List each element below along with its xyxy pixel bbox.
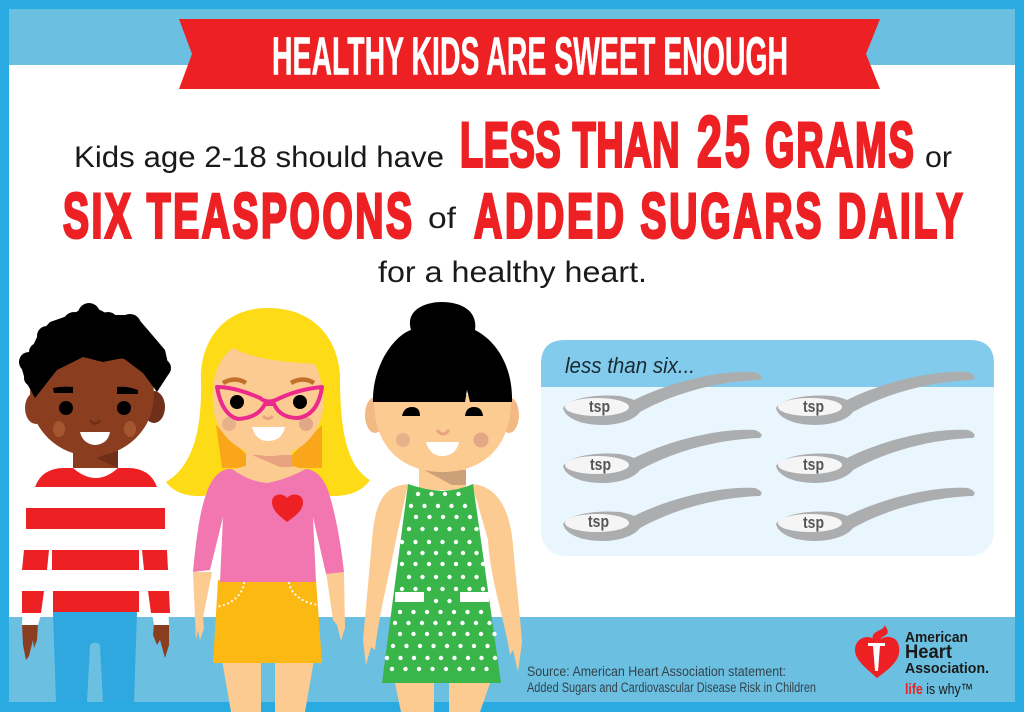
green dress — [382, 484, 501, 683]
girl legs — [222, 660, 314, 712]
green girl nose — [437, 430, 449, 434]
panel header — [541, 340, 994, 387]
girl neck — [230, 445, 308, 490]
spoon 3 — [563, 488, 762, 541]
green girl face — [374, 395, 511, 472]
headline message: or — [925, 141, 952, 174]
spoon 5: tsp — [803, 455, 824, 474]
headline message: LESS THAN — [460, 111, 680, 181]
title ribbon — [179, 19, 880, 89]
girl skirt — [213, 580, 322, 663]
spoon 1 — [563, 372, 762, 425]
spoon 4 — [776, 372, 975, 425]
logo: American Heart Association — [855, 625, 989, 698]
headline message: Kids age 2-18 should have — [74, 141, 444, 174]
headline message: GRAMS — [765, 111, 914, 181]
logo: American Heart Association: Association. — [905, 661, 989, 677]
spoon 2 — [563, 430, 762, 483]
girl glasses — [217, 387, 322, 419]
source note: Added Sugars and Cardiovascular Disease Risk in Children — [527, 680, 816, 695]
boy ears — [25, 392, 47, 424]
logo: American Heart Association: Heart — [905, 642, 953, 663]
panel body — [541, 340, 994, 556]
spoon 5 — [776, 430, 975, 483]
character: boy in striped shirt — [19, 303, 171, 702]
boy cheeks — [53, 421, 65, 437]
boy hands — [22, 624, 38, 660]
girl arms — [193, 572, 212, 640]
green girl eyes — [402, 407, 420, 416]
green girl arms — [363, 484, 408, 665]
boy striped shirt — [22, 468, 169, 625]
girl inner hair shade — [216, 425, 322, 468]
girl eyebrows — [223, 380, 246, 383]
bottom light blue band — [9, 617, 1015, 702]
green girl smile — [426, 442, 459, 456]
spoon 2: tsp — [590, 455, 611, 474]
spoon 4: tsp — [803, 397, 824, 416]
headline message: SIX TEASPOONS — [63, 182, 412, 252]
character: girl in green dress — [363, 302, 522, 712]
headline message — [63, 102, 963, 289]
girl eyes — [230, 395, 244, 409]
boy neck — [73, 445, 118, 479]
green dress polka dots — [387, 494, 496, 669]
green girl neck — [419, 460, 466, 490]
girl cheeks — [222, 417, 236, 431]
headline message: of — [428, 202, 457, 235]
logo heart and torch — [855, 625, 899, 678]
boy nose — [90, 420, 100, 424]
source note — [527, 664, 816, 695]
boy hair — [19, 303, 171, 398]
green girl legs — [395, 683, 490, 712]
girl smile — [252, 427, 285, 441]
source note: Source: American Heart Association statement: — [527, 664, 786, 679]
logo tagline: life is why™ — [905, 681, 973, 698]
spoon 1: tsp — [589, 397, 610, 416]
headline message: 25 — [697, 102, 750, 182]
girl nose — [263, 416, 273, 418]
girl pink top — [193, 469, 344, 582]
boy eyebrows — [53, 387, 73, 393]
green girl cheeks — [396, 433, 410, 447]
boy legs — [53, 612, 137, 702]
boy eyes — [59, 401, 73, 415]
panel heading: less than six... — [565, 353, 695, 378]
girl face — [213, 348, 323, 456]
green girl hair — [373, 302, 512, 402]
girl hair back — [166, 308, 370, 496]
white content area — [9, 65, 1015, 617]
green dress pockets — [395, 592, 424, 602]
boy face — [30, 334, 154, 456]
headline message: ADDED SUGARS DAILY — [474, 182, 963, 252]
boy smile — [80, 432, 110, 445]
spoon 3: tsp — [588, 512, 609, 531]
top light blue band — [9, 9, 1015, 65]
spoon 6: tsp — [803, 513, 824, 532]
character: blonde girl with glasses — [166, 308, 370, 712]
girl skirt stitching — [214, 583, 320, 607]
panel: less than six teaspoons — [541, 340, 994, 556]
green girl ears — [365, 397, 385, 433]
spoon 6 — [776, 488, 975, 541]
headline message: for a healthy heart. — [378, 256, 647, 289]
girl heart badge — [272, 495, 303, 522]
logo wordmark: American — [905, 630, 968, 646]
